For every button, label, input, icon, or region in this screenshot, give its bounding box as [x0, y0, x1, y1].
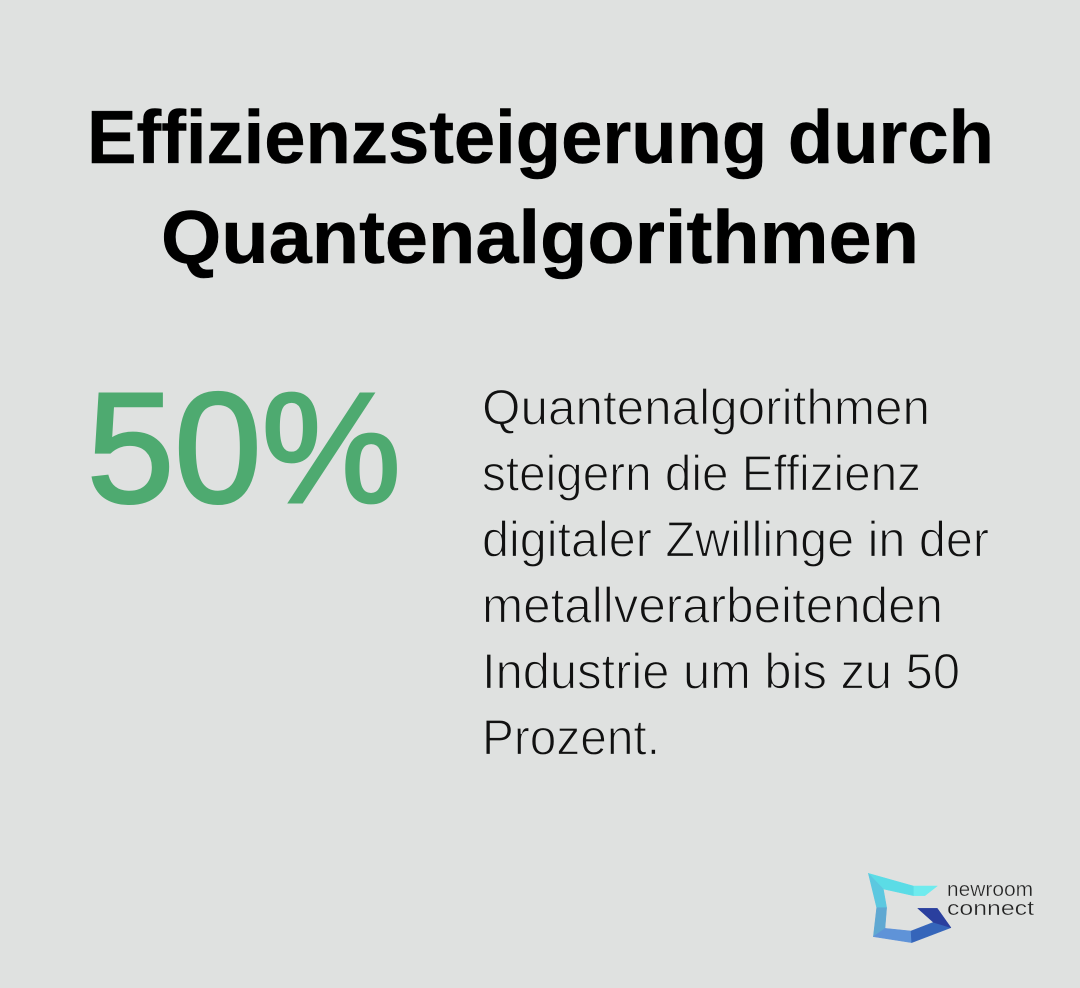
title: [87, 95, 994, 279]
logo wordmark: newroom: [947, 879, 1033, 901]
description text block: steigern die Effizienz: [482, 446, 921, 502]
logo wordmark: connect: [947, 898, 1035, 920]
description text block: metallverarbeitenden: [482, 578, 943, 634]
logo wordmark: [947, 879, 1035, 920]
description text block: Prozent.: [482, 710, 660, 766]
logo: newroom connect: [868, 873, 1035, 943]
big statistic: 50%: 50%: [87, 361, 401, 536]
description text block: Industrie um bis zu 50: [482, 644, 960, 700]
description text block: Quantenalgorithmen: [482, 380, 930, 436]
description text block: [482, 380, 989, 766]
title: Quantenalgorithmen: [161, 195, 919, 279]
description text block: digitaler Zwillinge in der: [482, 512, 989, 568]
icon: logo mark: [868, 873, 951, 943]
title: Effizienzsteigerung durch: [87, 95, 994, 179]
